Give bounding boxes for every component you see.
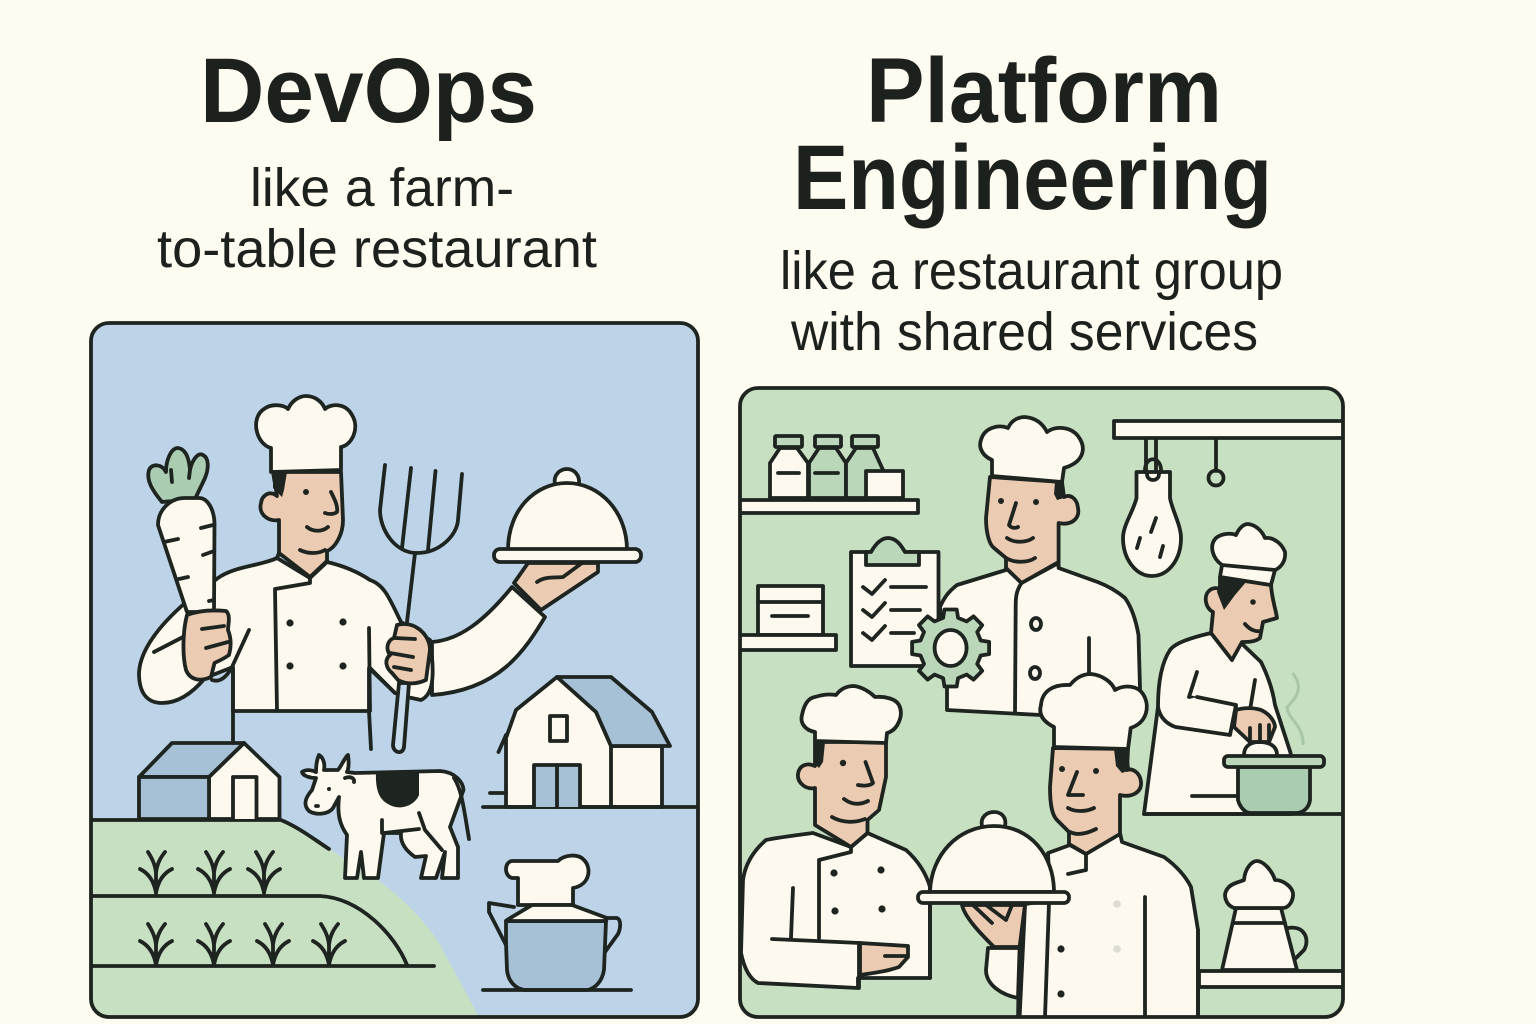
chef: body and arms [139,396,598,749]
crop rows [140,852,345,965]
chef: hand on pitchfork [386,624,430,683]
coffee pot and counter [1198,861,1349,1017]
chef hat [256,396,355,472]
heading: Platform Engineering: Platform [866,40,1222,142]
upper shelf with bottles [735,436,918,513]
panel: Platform Engineering kitchen scene [735,388,1354,1024]
heading: Platform Engineering [793,40,1272,229]
heading: Platform Engineering: Engineering [793,127,1272,229]
panel: DevOps farm scene [91,323,698,1017]
lower shelf with box [735,586,836,650]
chef: hand holding carrot [183,610,231,680]
cow [302,755,469,878]
cloche on tray [918,812,1069,903]
chef: bottom-right carrying cloche [1018,674,1198,1024]
chef: cook at pot [1144,524,1350,814]
heading: DevOps: DevOps [200,40,537,142]
barn [483,677,697,807]
chef: right arm and hand holding cloche [432,563,598,695]
hand and cuff under tray [962,905,1025,998]
subheading: like a farm-to-table restaurant [157,158,597,279]
chef: center manager [940,417,1140,715]
milk jug with cloth [483,856,631,990]
chef: head [260,472,343,577]
subheading: like a restaurant group with shared services [780,241,1283,362]
clipboard checklist [851,538,938,666]
chef: bottom-left with plate gesture [741,686,930,988]
pitchfork [380,465,462,752]
green field [91,820,479,1017]
subheading: like a restaurant group with shared services: with shared services [790,302,1258,362]
subheading: like a restaurant group with shared services: like a restaurant group [780,241,1283,301]
carrot [148,448,214,612]
gear icon [912,610,989,686]
silver cloche on tray [494,469,641,562]
small farm building [139,711,280,819]
hanging rail and ladle [1114,421,1354,576]
subheading: like a farm-to-table restaurant: to-table restaurant [157,219,597,279]
chef: jacket [139,553,433,749]
subheading: like a farm-to-table restaurant: like a farm- [250,158,514,218]
